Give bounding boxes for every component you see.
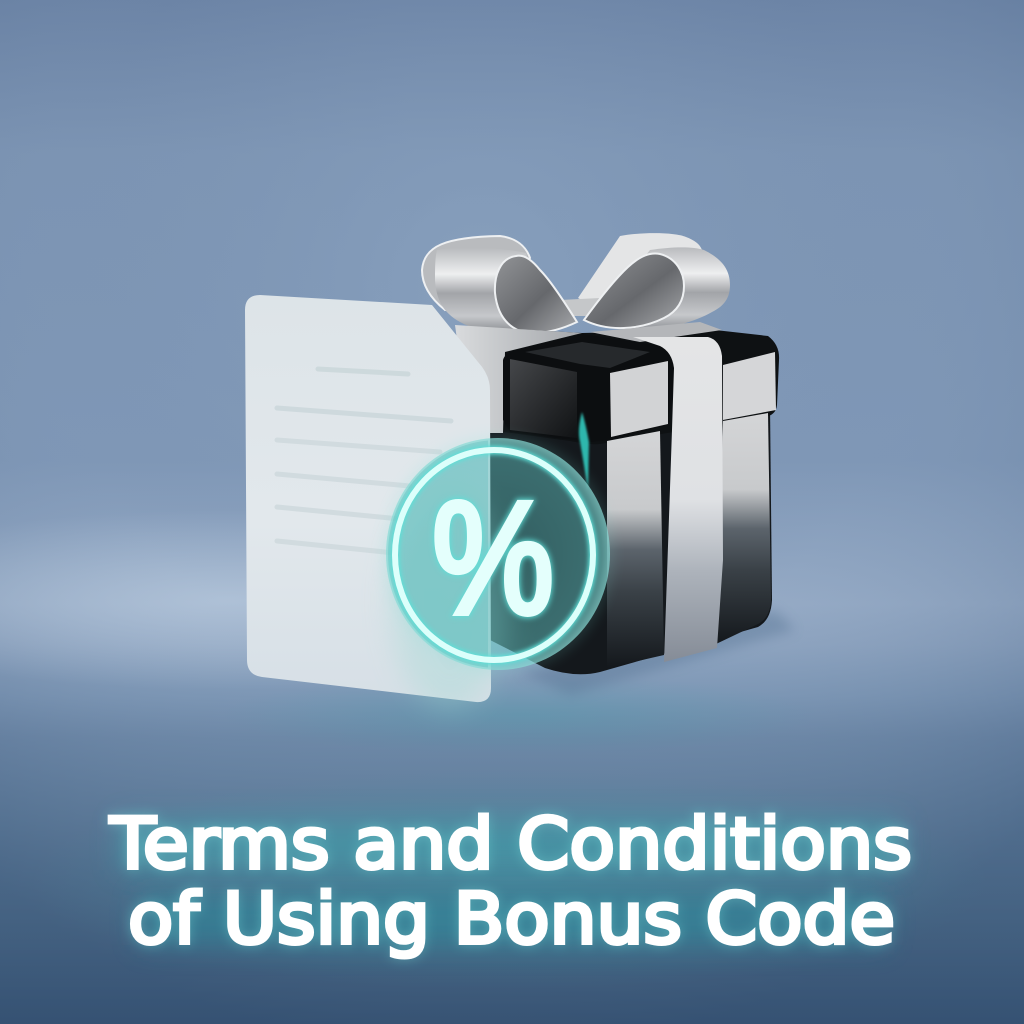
coin tint over paper xyxy=(388,440,488,668)
percent sign: % xyxy=(432,468,554,647)
title xyxy=(109,803,912,960)
percent coin xyxy=(382,434,614,674)
neon ring xyxy=(395,450,593,660)
title glow xyxy=(109,803,912,960)
title text: Terms and Conditions xyxy=(109,803,912,885)
teal reflection xyxy=(579,412,589,490)
lid xyxy=(455,322,779,444)
vertical ribbon xyxy=(633,337,723,662)
body silver panels xyxy=(607,413,771,668)
bow: left loop xyxy=(435,248,545,335)
illustration: gift box xyxy=(422,233,795,695)
title text: of Using Bonus Code xyxy=(128,878,895,960)
bow: right petal xyxy=(584,254,684,328)
title text xyxy=(109,803,912,960)
paper sheet xyxy=(245,295,491,702)
bow: back strips xyxy=(422,233,702,322)
document xyxy=(245,295,510,710)
text lines xyxy=(277,369,451,553)
box shadow xyxy=(520,610,795,695)
teal tint on paper xyxy=(390,490,510,710)
title glow: Terms and Conditions xyxy=(109,803,912,885)
percent sign: % xyxy=(432,468,554,647)
bow: left petal xyxy=(495,256,577,333)
coin disc xyxy=(386,438,610,670)
title glow: of Using Bonus Code xyxy=(128,878,895,960)
bow: right loop xyxy=(610,247,730,334)
box lower body xyxy=(490,405,772,674)
coin glow xyxy=(382,434,614,674)
